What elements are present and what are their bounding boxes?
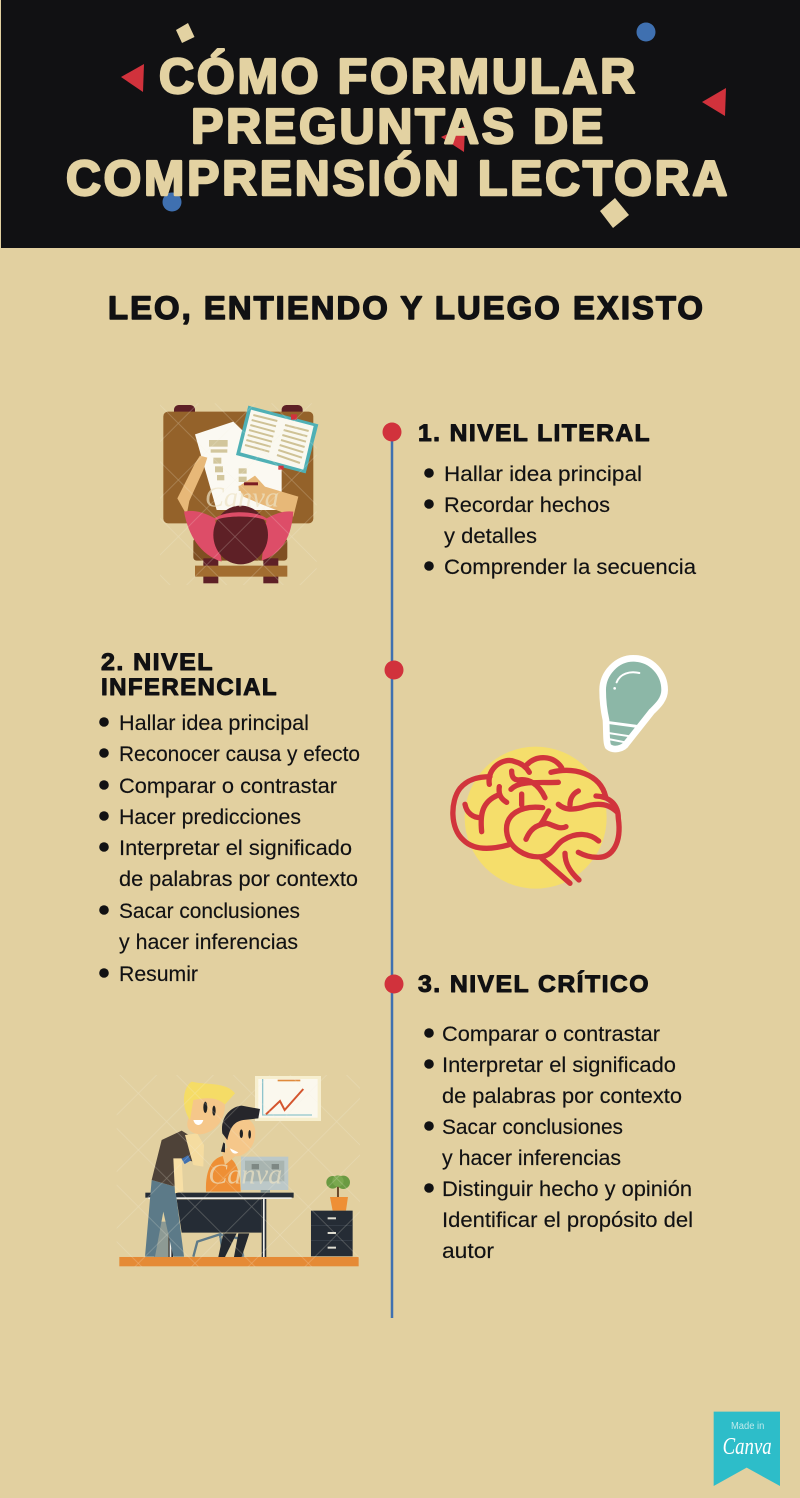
- title: CÓMO FORMULAR: [159, 49, 638, 104]
- level 2 heading: [101, 649, 278, 701]
- title: PREGUNTAS DE: [191, 100, 606, 154]
- level 1 list: y detalles: [444, 524, 537, 548]
- level 3 list: Identificar el propósito del: [442, 1208, 693, 1232]
- header band: [1, 0, 800, 248]
- person: standing man: [145, 1082, 235, 1257]
- level 3 list: y hacer inferencias: [442, 1146, 621, 1170]
- level 2 heading: 2. NIVEL: [101, 649, 214, 676]
- level 1 list: [424, 462, 696, 579]
- subtitle: LEO, ENTIENDO Y LUEGO EXISTO: [108, 290, 705, 326]
- icon: brain: [453, 747, 619, 889]
- icon: light bulb: [603, 658, 665, 749]
- made in Canva ribbon: Made in: [731, 1421, 764, 1432]
- wall chart: [255, 1076, 321, 1121]
- level 1 heading: 1. NIVEL LITERAL: [418, 420, 651, 447]
- filing cabinet: [311, 1211, 353, 1256]
- level 2 list: Comparar o contrastar: [119, 774, 337, 798]
- level 2 list: Sacar conclusiones: [119, 899, 300, 923]
- illustration: two people at a computer: [117, 1075, 360, 1267]
- level 2 list: Reconocer causa y efecto: [119, 742, 360, 766]
- timeline: [382, 422, 404, 1318]
- title: COMPRENSIÓN LECTORA: [66, 151, 730, 206]
- level 3 list: Distinguir hecho y opinión: [442, 1177, 692, 1201]
- level 2 list: [99, 711, 360, 986]
- level 3 list: autor: [442, 1239, 494, 1263]
- made in Canva ribbon: Canva: [723, 1434, 772, 1460]
- level 2 heading: INFERENCIAL: [101, 674, 278, 701]
- illustration: person studying at desk: Canva: [205, 483, 279, 514]
- level 1 list: Hallar idea principal: [444, 462, 642, 486]
- level 2 list: Hallar idea principal: [119, 711, 309, 735]
- level 2 list: Hacer predicciones: [119, 805, 301, 829]
- illustration: person studying at desk: [160, 403, 318, 585]
- illustration: brain and light bulb: [453, 658, 665, 889]
- person: seated man: [206, 1106, 260, 1192]
- level 3 list: Interpretar el significado: [442, 1053, 676, 1077]
- level 2 list: de palabras por contexto: [119, 867, 358, 891]
- level 2 list: y hacer inferencias: [119, 930, 298, 954]
- level 3 heading: 3. NIVEL CRÍTICO: [418, 970, 650, 998]
- level 3 list: de palabras por contexto: [442, 1084, 682, 1108]
- made in Canva ribbon: [714, 1412, 780, 1486]
- plant pot: [326, 1175, 350, 1211]
- level 1 list: Recordar hechos: [444, 493, 610, 517]
- level 1 list: Comprender la secuencia: [444, 555, 696, 579]
- level 3 list: Comparar o contrastar: [442, 1022, 660, 1046]
- level 2 list: Interpretar el significado: [119, 836, 352, 860]
- computer monitor: [241, 1157, 288, 1193]
- decorative confetti shapes: [121, 22, 726, 228]
- level 3 list: Sacar conclusiones: [442, 1115, 623, 1139]
- illustration: two people at a computer: Canva: [208, 1159, 282, 1190]
- level 2 list: Resumir: [119, 962, 198, 986]
- title: [66, 49, 730, 206]
- level 3 list: [424, 1022, 693, 1263]
